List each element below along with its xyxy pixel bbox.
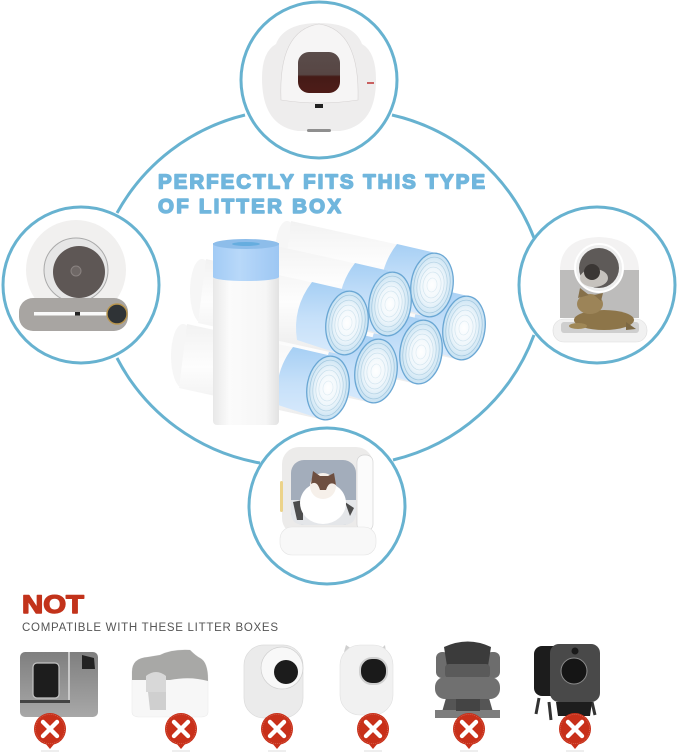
incompatible box 1 [20, 652, 98, 717]
incompatible box 3 [244, 645, 303, 718]
title: OF LITTER BOX [158, 195, 341, 218]
incompatible box 5 [435, 642, 500, 718]
circle: bottom litter box [249, 428, 405, 584]
title: PERFECTLY FITS THIS TYPE [158, 170, 485, 194]
icon: white cube litter box with cat [280, 447, 376, 555]
circle: top litter box [241, 2, 397, 158]
x badge 1 [34, 713, 66, 752]
subheading: COMPATIBLE WITH THESE LITTER BOXES [22, 622, 278, 634]
incompatible box 2 [132, 650, 208, 717]
x badge 2 [165, 713, 197, 752]
x badge 6 [559, 713, 591, 752]
connecting outline arcs [117, 115, 534, 463]
incompatible box 4 [340, 645, 393, 715]
circle: left litter box [3, 207, 159, 363]
heading: NOT: NOT [22, 591, 84, 619]
icon: dome litter box with cats [553, 237, 647, 342]
circle: right litter box [519, 207, 675, 363]
x badge 3 [261, 713, 293, 752]
incompatible box 6 [534, 644, 600, 720]
icon: round white litter box on grey base [19, 220, 128, 331]
title [158, 170, 485, 218]
x badge 4 [357, 713, 389, 752]
icon: white litter box with dark window [262, 23, 376, 132]
x badge 5 [453, 713, 485, 752]
product: stack of blue liner rolls [171, 221, 489, 425]
